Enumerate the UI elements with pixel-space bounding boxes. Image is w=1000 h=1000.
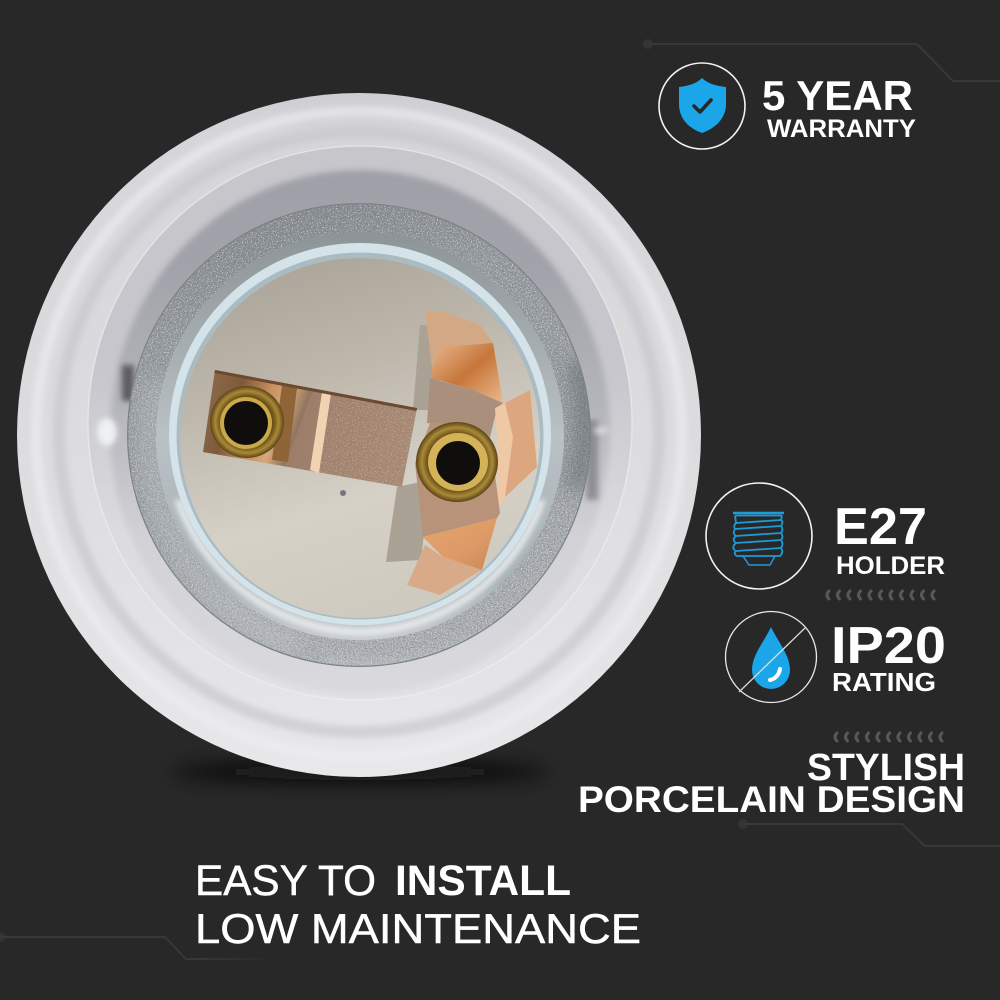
shadow under contact <box>386 325 440 562</box>
product photo: porcelain E27 lamp holder <box>17 93 701 781</box>
easy to install text <box>195 857 641 952</box>
circuit line: top right <box>643 39 1000 81</box>
circuit line: bottom left <box>0 932 274 960</box>
small mark on base <box>340 490 346 496</box>
easy to install text: LOW MAINTENANCE <box>195 905 641 952</box>
metal inner lip <box>156 232 564 640</box>
ceramic base <box>180 258 540 618</box>
icon: bulb socket <box>706 483 812 589</box>
chevron divider upper <box>827 591 934 599</box>
stylish porcelain design text <box>578 747 965 820</box>
warranty heading: 5 YEAR <box>762 72 913 119</box>
holder subheading: HOLDER <box>836 552 945 580</box>
IP20 heading: IP20 <box>831 617 946 675</box>
rating subheading: RATING <box>832 667 936 697</box>
circuit line: middle right <box>738 819 1000 846</box>
stylish porcelain design text: STYLISH <box>807 747 965 789</box>
E27 heading: E27 <box>834 498 927 556</box>
porcelain outer rim <box>17 93 701 777</box>
brass eyelet left <box>210 386 284 458</box>
IP20 rating badge <box>726 612 946 702</box>
icon: shield <box>659 63 745 149</box>
metal flange ring <box>127 203 591 667</box>
chevron divider lower <box>835 733 942 741</box>
contact assembly <box>203 310 537 595</box>
folded copper contact <box>407 310 537 595</box>
easy to install text: INSTALL <box>395 857 571 905</box>
contact shadow <box>170 763 550 781</box>
stylish porcelain design text: PORCELAIN DESIGN <box>578 779 965 820</box>
E27 holder badge <box>706 483 945 589</box>
warranty subheading: WARRANTY <box>767 115 916 143</box>
copper contact strip <box>203 370 417 487</box>
warranty badge <box>659 63 916 149</box>
brass eyelet right <box>416 422 498 502</box>
easy to install text: EASY TO <box>195 857 376 905</box>
porcelain inner well <box>88 146 632 700</box>
icon: water drop <box>726 612 816 702</box>
